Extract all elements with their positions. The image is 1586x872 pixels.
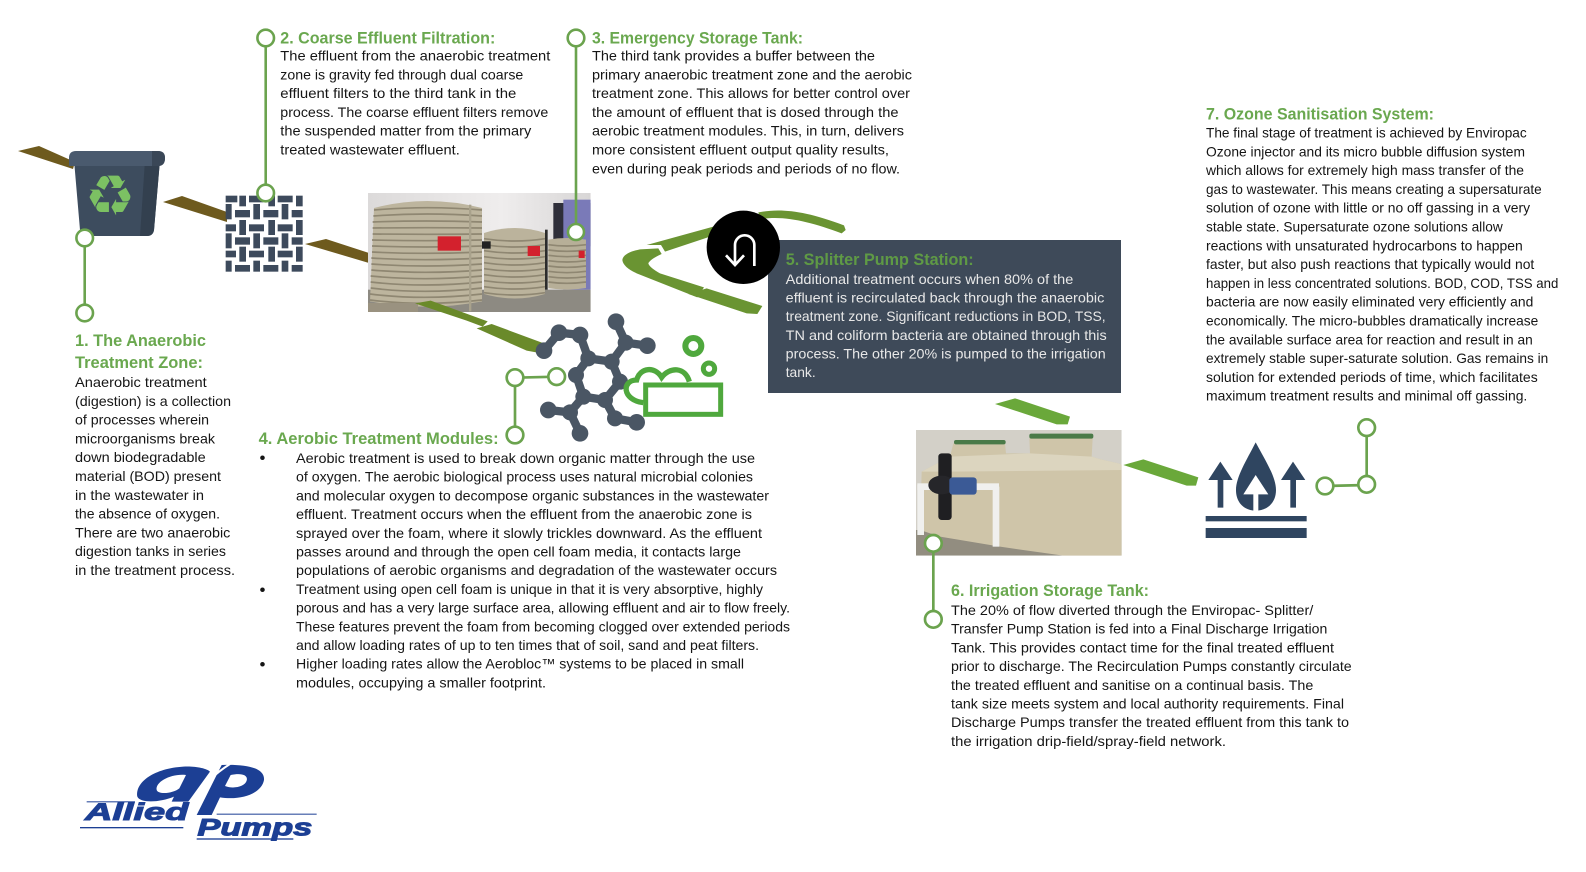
dark panel: splitter pump station: TN and coliform bacteria are obtained through this: [786, 327, 1107, 343]
text: step 6 irrigation storage tank: The 20% of flow diverted through the Enviropac- Splitter/: [951, 602, 1313, 618]
text: step 6 irrigation storage tank: Discharge Pumps transfer the treated effluent from this tank to: [951, 714, 1349, 730]
text: step 2 coarse effluent filtration: the suspended matter from the primary: [280, 123, 531, 139]
text: step 1 anaerobic treatment zone: down biodegradable: [75, 449, 206, 465]
text: step 7 ozone sanitisation system: happen in less concentrated solutions. BOD, COD, TSS and: [1206, 275, 1558, 291]
text: step 4 aerobic treatment modules: [259, 430, 790, 690]
text: step 7 ozone sanitisation system: solution of ozone with little or no off gassing in a very: [1206, 200, 1530, 216]
text: step 2 coarse effluent filtration: treated wastewater effluent.: [280, 142, 460, 158]
text: step 1 anaerobic treatment zone: in the treatment process.: [75, 562, 235, 578]
text: step 3 emergency storage tank: The third tank provides a buffer between the: [592, 48, 875, 64]
icon: molecule: [536, 313, 656, 442]
photo: irrigation tank: [916, 430, 1122, 556]
text: step 1 anaerobic treatment zone: digestion tanks in series: [75, 543, 226, 559]
icon: ozone sanitisation: [1206, 442, 1307, 538]
dark panel: splitter pump station: Additional treatment occurs when 80% of the: [786, 271, 1074, 287]
text: step 1 anaerobic treatment zone: Treatment Zone:: [75, 354, 203, 372]
text: step 4 aerobic treatment modules: sprayed over the foam, where it slowly trickles downward. As the effluent: [296, 525, 762, 541]
dark panel: splitter pump station: effluent is recirculated back through the anaerobic: [786, 290, 1104, 306]
icon: u-turn pump badge: [707, 211, 780, 284]
text: step 2 coarse effluent filtration: 2. Coarse Effluent Filtration:: [280, 30, 495, 48]
text: step 1 anaerobic treatment zone: of processes wherein: [75, 412, 209, 428]
text: step 4 aerobic treatment modules: and molecular oxygen to decompose organic substances in the wastewater: [296, 487, 769, 503]
text: step 4 aerobic treatment modules: populations of aerobic organisms and degradation of the wastewater occurs: [296, 562, 777, 578]
text: step 4 aerobic treatment modules: 4. Aerobic Treatment Modules:: [259, 430, 499, 448]
text: step 4 aerobic treatment modules: •: [260, 580, 266, 600]
icon: recycling bin: ♻: [85, 164, 135, 229]
arrow: inflow to bin: [18, 146, 75, 169]
logo: Allied Pumps: [80, 764, 317, 842]
text: step 6 irrigation storage tank: Transfer Pump Station is fed into a Final Discharge Irrigation: [951, 621, 1327, 637]
text: step 7 ozone sanitisation system: The final stage of treatment is achieved by Enviropac: [1206, 124, 1527, 140]
text: step 2 coarse effluent filtration: [280, 30, 550, 158]
text: step 4 aerobic treatment modules: Treatment using open cell foam is unique in that it is very absorptive, highly: [296, 581, 763, 597]
text: step 4 aerobic treatment modules: and allow loading rates of up to ten times that of soil, sand and peat filters.: [296, 637, 759, 653]
text: step 3 emergency storage tank: the amount of effluent that is dosed through the: [592, 104, 899, 120]
text: step 3 emergency storage tank: aerobic treatment modules. This, in turn, delivers: [592, 123, 904, 139]
text: step 4 aerobic treatment modules: of oxygen. The aerobic biological process uses natural microbial colonies: [296, 469, 753, 485]
text: step 3 emergency storage tank: more consistent effluent output quality results,: [592, 142, 889, 158]
icon: soap foam: [626, 338, 721, 414]
connector: step 1: [76, 230, 93, 321]
connector: step 7: [1317, 419, 1375, 494]
text: step 7 ozone sanitisation system: extremely stable super-saturate solution. Gas remains in: [1206, 350, 1548, 366]
text: step 3 emergency storage tank: even during peak periods and periods of no flow.: [592, 160, 900, 176]
text: step 6 irrigation storage tank: Tank. This provides contact time for the final treated effluent: [951, 639, 1334, 655]
text: step 3 emergency storage tank: 3. Emergency Storage Tank:: [592, 30, 803, 48]
connector: step 4: [507, 368, 565, 443]
logo: Allied Pumps: Pumps: [197, 815, 312, 842]
text: step 6 irrigation storage tank: the treated effluent and sanitise on a continual basis. The: [951, 677, 1314, 693]
text: step 4 aerobic treatment modules: effluent. Treatment occurs when the effluent from the anaerobic zone is: [296, 506, 752, 522]
text: step 7 ozone sanitisation system: 7. Ozone Sanitisation System:: [1206, 106, 1434, 124]
arrow: tanks to aerobic modules: [415, 301, 547, 353]
text: step 2 coarse effluent filtration: effluent filters to the third tank in the: [280, 85, 517, 101]
logo: Allied Pumps: Allied: [83, 799, 190, 826]
text: step 2 coarse effluent filtration: process. The coarse effluent filters remove: [280, 104, 549, 120]
text: step 4 aerobic treatment modules: passes around and through the open cell foam media, it contacts large: [296, 544, 741, 560]
text: step 2 coarse effluent filtration: zone is gravity fed through dual coarse: [280, 66, 524, 82]
text: step 7 ozone sanitisation system: gas to wastewater. This means creating a supersaturate: [1206, 181, 1542, 197]
dark panel: splitter pump station: 5. Splitter Pump Station:: [786, 251, 974, 269]
text: step 7 ozone sanitisation system: maximum treatment results and minimal off gassing.: [1206, 388, 1527, 404]
dark panel: splitter pump station: process. The other 20% is pumped to the irrigation: [786, 345, 1106, 361]
text: step 1 anaerobic treatment zone: microorganisms break: [75, 430, 216, 446]
photo: storage tanks: [368, 193, 591, 312]
text: step 1 anaerobic treatment zone: (digestion) is a collection: [75, 393, 231, 409]
text: step 4 aerobic treatment modules: porous and has a very large surface area, allowing effluent and air to flow freely.: [296, 600, 790, 616]
text: step 4 aerobic treatment modules: Higher loading rates allow the Aerobloc™ systems to be placed in small: [296, 656, 744, 672]
text: step 7 ozone sanitisation system: the available surface area for reaction and result in an: [1206, 331, 1533, 347]
connector: step 6: [925, 535, 942, 628]
icon: basket weave filter: [226, 196, 303, 272]
text: step 6 irrigation storage tank: [951, 582, 1352, 749]
text: step 4 aerobic treatment modules: modules, occupying a smaller footprint.: [296, 674, 546, 690]
text: step 6 irrigation storage tank: prior to discharge. The Recirculation Pumps constantly circulate: [951, 658, 1352, 674]
dark panel: splitter pump station: [768, 240, 1121, 393]
connector: step 3: [568, 30, 584, 240]
text: step 7 ozone sanitisation system: bacteria are now easily eliminated very efficiently and: [1206, 294, 1533, 310]
connector: step 2: [257, 30, 274, 201]
text: step 1 anaerobic treatment zone: Anaerobic treatment: [75, 374, 207, 390]
text: step 4 aerobic treatment modules: Aerobic treatment is used to break down organic matter through the use: [296, 450, 755, 466]
arrow: filter to tanks: [305, 239, 369, 263]
text: step 3 emergency storage tank: primary anaerobic treatment zone and the aerobic: [592, 66, 912, 82]
text: step 1 anaerobic treatment zone: [75, 332, 235, 578]
text: step 1 anaerobic treatment zone: the absence of oxygen.: [75, 506, 220, 522]
text: step 6 irrigation storage tank: the irrigation drip-field/spray-field network.: [951, 733, 1226, 749]
text: step 7 ozone sanitisation system: economically. The micro-bubbles dramatically increase: [1206, 312, 1539, 328]
text: step 7 ozone sanitisation system: Ozone injector and its micro bubble diffusion system: [1206, 143, 1525, 159]
text: step 7 ozone sanitisation system: which allows for extremely high mass transfer of the: [1205, 162, 1524, 178]
text: step 7 ozone sanitisation system: [1205, 106, 1558, 404]
text: step 7 ozone sanitisation system: faster, but also push reactions that typically would not: [1206, 256, 1534, 272]
text: step 4 aerobic treatment modules: •: [260, 655, 266, 674]
text: step 3 emergency storage tank: [592, 30, 912, 176]
text: step 1 anaerobic treatment zone: material (BOD) present: [75, 468, 221, 484]
text: step 1 anaerobic treatment zone: in the wastewater in: [75, 487, 204, 503]
arrow: irrigation tank to ozone: [1123, 459, 1198, 486]
icon: recycling bin: [69, 151, 165, 236]
text: step 7 ozone sanitisation system: solution for extended periods of time, which facilitates: [1206, 369, 1538, 385]
text: step 2 coarse effluent filtration: The effluent from the anaerobic treatment: [280, 48, 550, 64]
arrow: splitter to irrigation tank: [995, 398, 1070, 424]
text: step 7 ozone sanitisation system: reactions with unsaturated hydrocarbons to happen: [1206, 237, 1523, 253]
text: step 4 aerobic treatment modules: These features prevent the foam from becoming clogged over extended periods: [296, 618, 790, 634]
dark panel: splitter pump station: treatment zone. Significant reductions in BOD, TSS,: [786, 308, 1106, 324]
dark panel: splitter pump station: tank.: [786, 364, 816, 380]
arrows: recirculation loop: [622, 210, 846, 314]
text: step 1 anaerobic treatment zone: There are two anaerobic: [75, 524, 230, 540]
arrow: bin to filter: [163, 196, 227, 222]
text: step 3 emergency storage tank: treatment zone. This allows for better control over: [592, 85, 910, 101]
text: step 7 ozone sanitisation system: stable state. Supersaturate ozone solutions allow: [1206, 218, 1504, 234]
text: step 6 irrigation storage tank: 6. Irrigation Storage Tank:: [951, 582, 1149, 600]
text: step 4 aerobic treatment modules: •: [260, 448, 266, 468]
text: step 6 irrigation storage tank: tank size meets system and local authority requirements. Final: [951, 696, 1344, 712]
text: step 1 anaerobic treatment zone: 1. The Anaerobic: [75, 332, 206, 350]
